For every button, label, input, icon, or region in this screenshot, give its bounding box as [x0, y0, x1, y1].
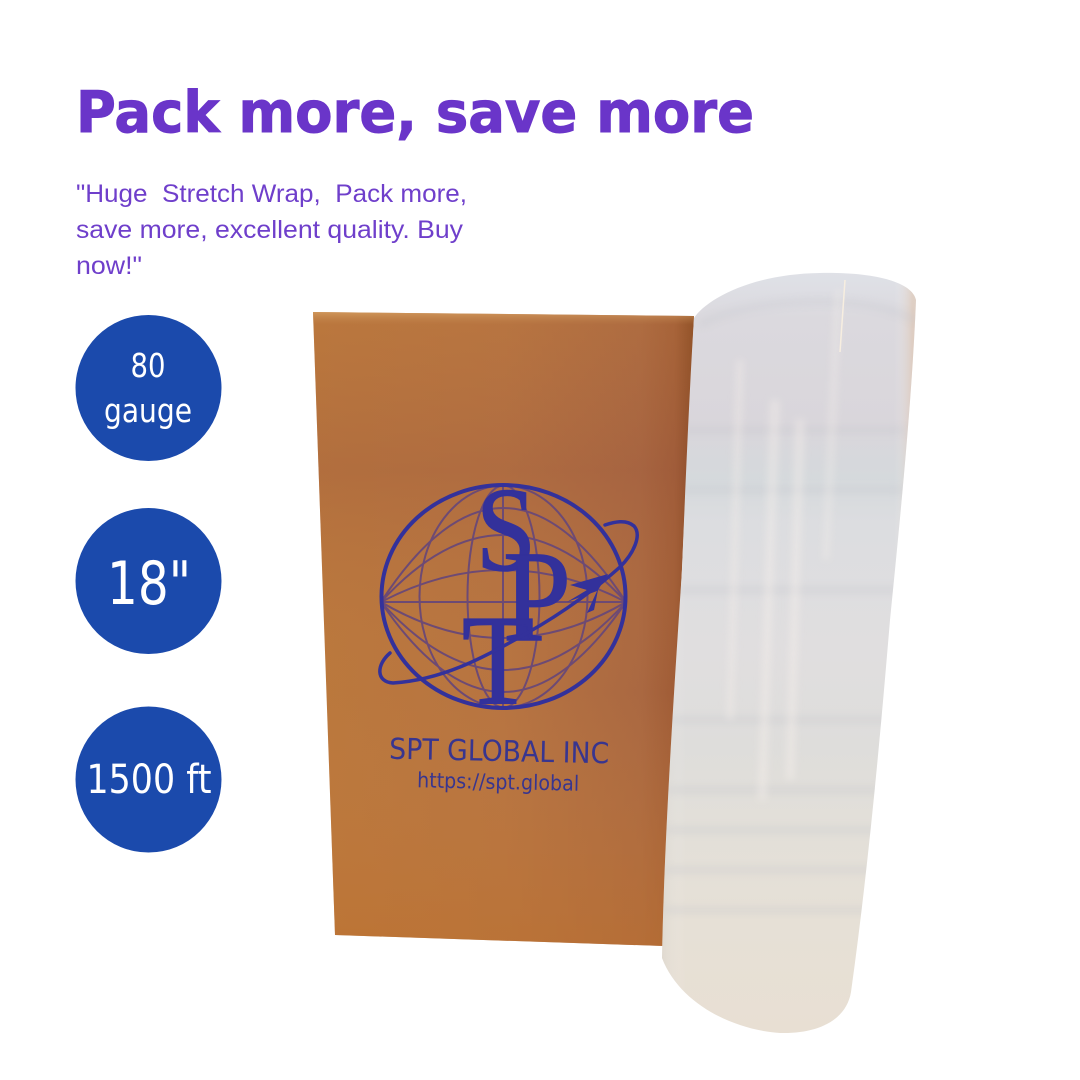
SPT monogram letters: S: [476, 463, 536, 596]
title: Pack more, save more: [76, 80, 754, 146]
SPT monogram letters: T: [462, 589, 534, 731]
box text: website: https://spt.global: [417, 768, 579, 796]
box logo: SPT globe: [380, 463, 637, 796]
badge: 18 inch: [76, 508, 222, 654]
description text: [76, 180, 467, 280]
SPT monogram letters: P: [503, 525, 571, 669]
orbit swoosh with plane: [380, 522, 637, 683]
box text: company name: SPT GLOBAL INC: [389, 732, 610, 770]
description text: "Huge Stretch Wrap, Pack more,: [76, 180, 467, 208]
cardboard box: [313, 312, 694, 946]
badge: 80 gauge: 80: [130, 346, 166, 385]
badge: 1500 ft: [76, 706, 222, 852]
badge: 1500 ft: 1500 ft: [86, 757, 212, 803]
badge: 80 gauge: [76, 315, 222, 461]
description text: save more, excellent quality. Buy: [76, 216, 464, 244]
infographic canvas: [76, 88, 916, 1033]
stretch wrap roll: [660, 270, 920, 1040]
SPT monogram letters: [462, 463, 571, 731]
badge: 80 gauge: gauge: [104, 391, 192, 430]
description text: now!": [76, 252, 142, 280]
badge: 18 inch: 18": [107, 549, 191, 619]
